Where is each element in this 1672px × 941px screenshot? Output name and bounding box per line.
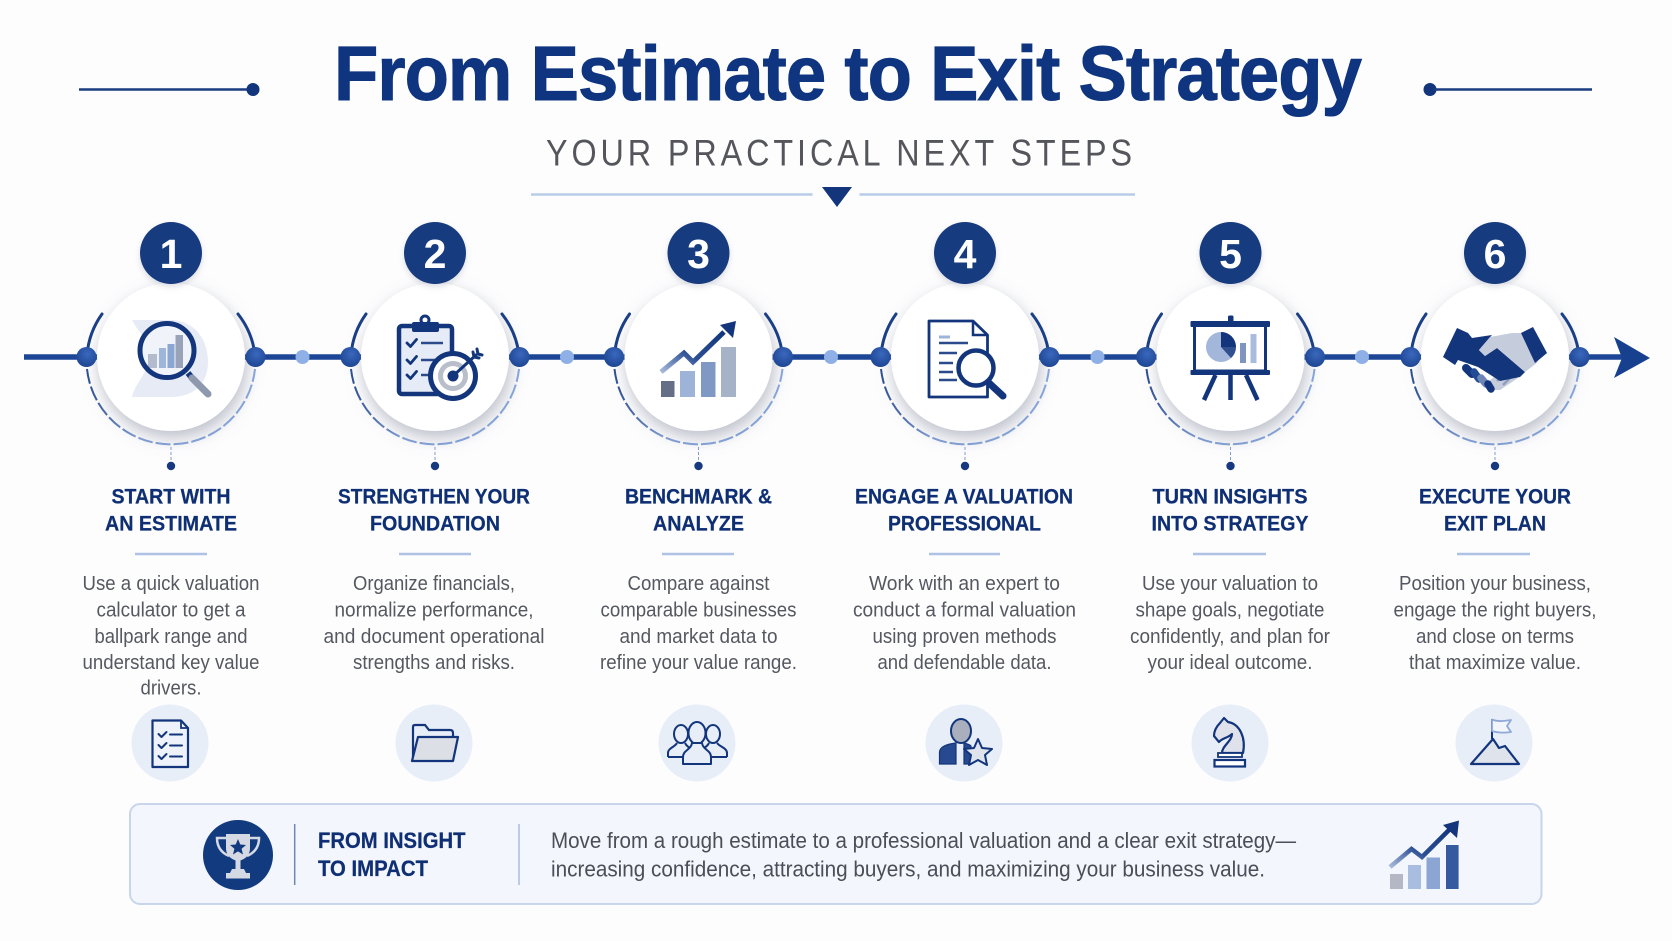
icon: handshake xyxy=(1443,327,1547,390)
step 1 number badge: 1 xyxy=(160,231,182,277)
step 4 description: and defendable data. xyxy=(878,652,1052,674)
step 2 description: normalize performance, xyxy=(334,600,534,622)
step 5 number badge xyxy=(1200,222,1262,284)
step 2 description: strengths and risks. xyxy=(353,652,515,674)
step 5 xyxy=(1130,222,1330,782)
step 2 heading: STRENGTHEN YOUR xyxy=(338,484,530,508)
step 1 number badge xyxy=(140,222,202,284)
step 1 description: drivers. xyxy=(140,678,202,700)
icon: clipboard with target xyxy=(399,316,482,398)
step 2 description: and document operational xyxy=(324,626,544,648)
step 5 description xyxy=(1130,573,1330,674)
step 3 divider xyxy=(662,553,734,555)
step 1 description: understand key value xyxy=(82,652,260,674)
step 3 heading: ANALYZE xyxy=(653,512,744,536)
divider xyxy=(518,824,520,885)
step 4 description xyxy=(853,573,1076,674)
step 5 heading: INTO STRATEGY xyxy=(1152,512,1308,536)
step 3 description: refine your value range. xyxy=(600,652,797,674)
icon: document with magnifier xyxy=(929,321,1003,397)
step 3 node ring xyxy=(604,283,793,470)
step 6 number badge: 6 xyxy=(1484,231,1506,277)
title ornament: left line xyxy=(79,83,260,96)
step 4 divider xyxy=(929,553,1000,555)
step 3 number badge: 3 xyxy=(687,231,710,277)
step 3 xyxy=(600,222,797,782)
step 2 divider xyxy=(399,553,471,555)
step 1 divider xyxy=(135,553,207,555)
step 1 description: ballpark range and xyxy=(94,626,248,648)
callout heading: TO IMPACT xyxy=(318,856,428,881)
step 2 xyxy=(324,222,544,782)
step 3 description xyxy=(600,573,797,674)
step 5 heading: TURN INSIGHTS xyxy=(1152,484,1308,508)
step 6 heading: EXIT PLAN xyxy=(1444,512,1546,536)
step 2 number badge xyxy=(404,222,466,284)
icon: group of people xyxy=(658,704,736,782)
timeline line xyxy=(24,354,1630,360)
step 2 description xyxy=(324,573,544,674)
step 5 description: shape goals, negotiate xyxy=(1136,600,1324,622)
icon: rising bar chart with arrow xyxy=(661,321,736,397)
step 6 node ring xyxy=(1400,283,1590,470)
step 5 description: Use your valuation to xyxy=(1142,573,1318,595)
callout heading: FROM INSIGHT xyxy=(318,828,466,853)
step 6 xyxy=(1394,222,1596,782)
step 4 number badge xyxy=(934,222,996,284)
step 4 description: using proven methods xyxy=(872,626,1056,648)
step 3 heading: BENCHMARK & xyxy=(625,484,772,508)
step 6 description: that maximize value. xyxy=(1409,652,1581,674)
step 4 heading xyxy=(855,484,1073,536)
step 5 node ring xyxy=(1136,283,1325,470)
step 5 description: confidently, and plan for xyxy=(1130,626,1330,648)
step 4 node ring xyxy=(870,283,1060,470)
step 2 heading xyxy=(338,484,530,536)
step 2 number badge: 2 xyxy=(424,231,446,277)
icon: folder xyxy=(396,704,472,782)
step 6 divider xyxy=(1457,553,1530,555)
callout text: Move from a rough estimate to a professional valuation and a clear exit strategy— xyxy=(551,828,1296,853)
step 4 heading: ENGAGE A VALUATION xyxy=(855,484,1073,508)
step 4 xyxy=(853,222,1076,782)
step 1 heading xyxy=(105,484,237,536)
step 1 xyxy=(76,222,266,782)
title: From Estimate to Exit Strategy xyxy=(334,31,1362,117)
step 6 heading: EXECUTE YOUR xyxy=(1419,484,1571,508)
step 6 description: and close on terms xyxy=(1416,626,1574,648)
callout text: increasing confidence, attracting buyers, and maximizing your business value. xyxy=(551,856,1265,882)
step 2 description: Organize financials, xyxy=(353,573,515,595)
step 5 number badge: 5 xyxy=(1219,231,1242,277)
icon: magnifier over bar chart xyxy=(132,320,208,397)
step 3 description: comparable businesses xyxy=(600,600,796,622)
icon: presentation easel xyxy=(1190,316,1270,400)
panel: from insight to impact xyxy=(130,804,1542,904)
step 3 number badge xyxy=(668,222,730,284)
step 2 node ring xyxy=(340,283,530,470)
step 1 node ring xyxy=(76,283,266,470)
subtitle: YOUR PRACTICAL NEXT STEPS xyxy=(546,132,1136,174)
step 1 description: calculator to get a xyxy=(96,600,246,622)
icon: chess knight xyxy=(1192,704,1268,782)
step 1 description xyxy=(82,573,260,700)
timeline arrow head xyxy=(1614,337,1650,378)
step 5 divider xyxy=(1193,553,1266,555)
step 4 heading: PROFESSIONAL xyxy=(888,512,1041,536)
step 5 heading xyxy=(1152,484,1308,536)
step 2 heading: FOUNDATION xyxy=(370,512,500,536)
timeline connector dots xyxy=(296,350,1369,364)
step 6 description: engage the right buyers, xyxy=(1394,600,1596,622)
step 6 number badge xyxy=(1464,222,1526,284)
callout text xyxy=(551,828,1296,882)
step 1 heading: START WITH xyxy=(112,484,230,508)
step 4 number badge: 4 xyxy=(954,231,977,277)
step 4 description: conduct a formal valuation xyxy=(853,600,1076,622)
step 5 description: your ideal outcome. xyxy=(1148,652,1312,674)
step 1 description: Use a quick valuation xyxy=(82,573,260,595)
divider xyxy=(294,824,296,885)
step 3 description: Compare against xyxy=(628,573,770,595)
title ornament: right line xyxy=(1424,83,1592,96)
step 6 description xyxy=(1394,573,1596,674)
step 1 heading: AN ESTIMATE xyxy=(105,512,237,536)
icon: growth chart xyxy=(1390,820,1459,889)
step 3 heading xyxy=(625,484,772,536)
step 3 description: and market data to xyxy=(620,626,778,648)
step 6 heading xyxy=(1419,484,1571,536)
callout heading xyxy=(318,828,466,881)
icon: checklist document xyxy=(132,704,208,782)
icon: expert with star xyxy=(926,704,1002,782)
icon: trophy badge xyxy=(203,820,273,890)
step 6 description: Position your business, xyxy=(1399,573,1591,595)
subtitle divider with triangle xyxy=(531,187,1135,207)
icon: mountain with flag xyxy=(1456,704,1532,782)
step 4 description: Work with an expert to xyxy=(869,573,1060,595)
